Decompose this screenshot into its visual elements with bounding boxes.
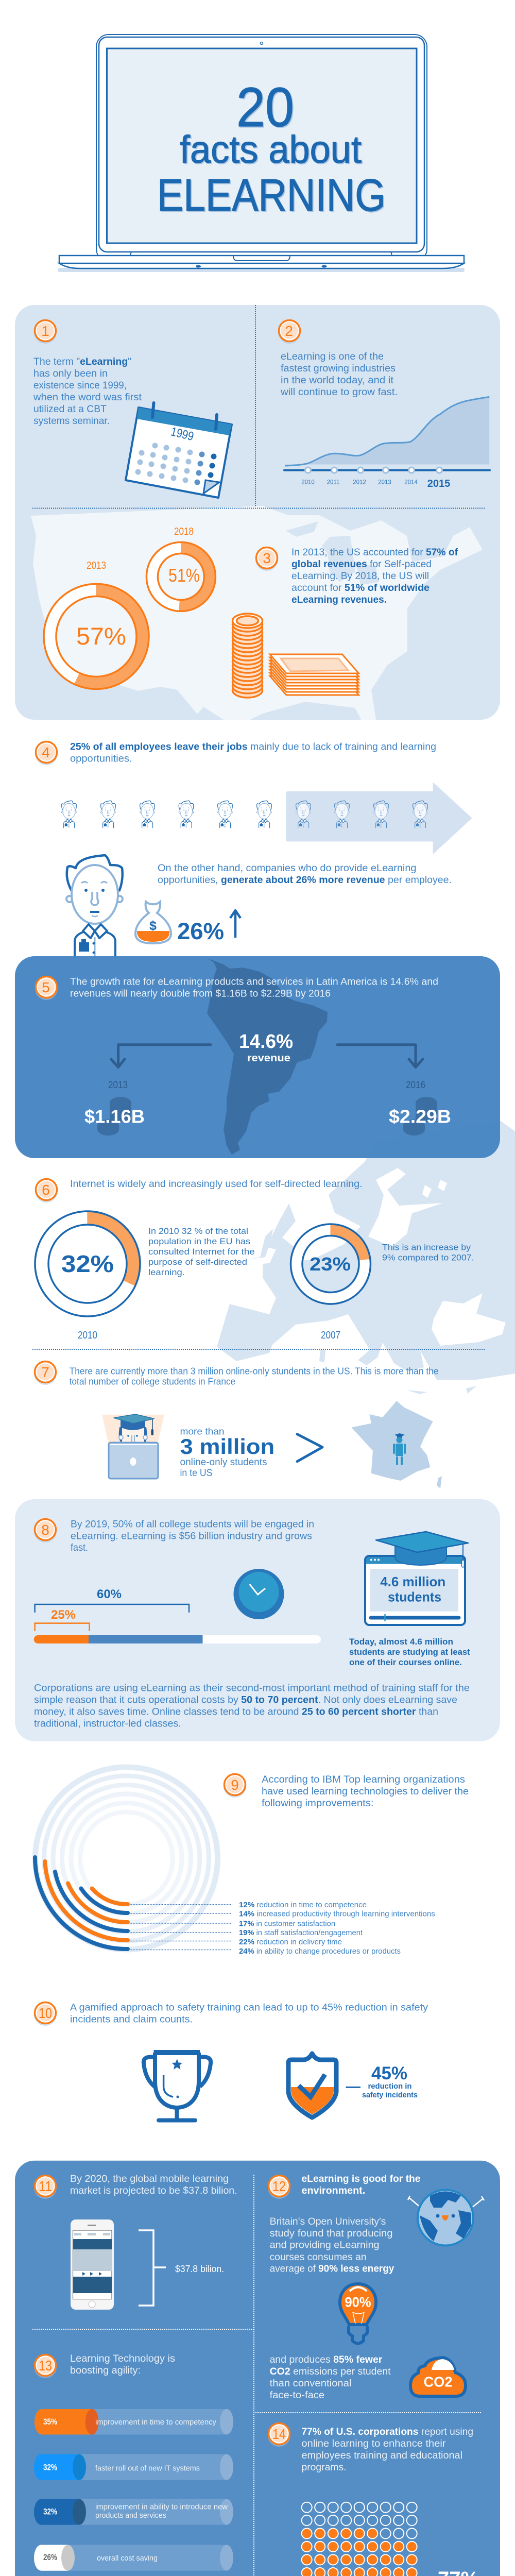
panel: fact 9 [35, 1767, 469, 1956]
fact 3 text: global revenues for Self-paced [291, 558, 432, 570]
arrow: to 2016 [337, 1045, 423, 1067]
fact 5 badge [35, 977, 58, 1000]
icon: greater than [297, 1434, 322, 1462]
fact 3 text: account for 51% of worldwide [291, 582, 430, 594]
chart: industry growth area timeline: 2011 [327, 479, 339, 485]
fact 12 heading: environment. [302, 2185, 365, 2196]
fact 14 text: 77% of U.S. corporations report using [302, 2426, 473, 2437]
fact 3 badge [255, 547, 278, 571]
stat: 26% up: 26% [177, 918, 224, 944]
stat: 3 million: more than [180, 1426, 225, 1436]
stat: 2016 revenue: $2.29B [389, 1106, 451, 1127]
fact 8 text: By 2019, 50% of all college students will be engaged in [71, 1518, 314, 1530]
text: today 4.6 million: Today, almost 4.6 million [349, 1637, 453, 1647]
fact 6 badge [35, 1179, 58, 1202]
fact 1 text: The term "eLearning" [33, 356, 131, 367]
fact 13 badge: 13 [39, 2358, 52, 2374]
fact 2 text [280, 351, 398, 398]
text: increase 2007: 9% compared to 2007. [382, 1253, 474, 1263]
fact 9 badge: 9 [231, 1777, 239, 1793]
panel: facts 1 to 3 [15, 305, 500, 720]
text: EU 2010: In 2010 32 % of the total [148, 1226, 248, 1236]
panel: fact 5 Latin America [15, 956, 500, 1158]
bar: 26% cost saving [34, 2545, 233, 2571]
fact 12 text: CO2: and produces 85% fewer [270, 2354, 383, 2365]
fact 1 text [33, 356, 142, 427]
donut: 2018 51% [146, 526, 215, 611]
panel: facts 11 to 14 [15, 2161, 500, 2576]
icon: large employee [66, 855, 123, 958]
chart: industry growth area timeline: 2013 [378, 479, 391, 485]
donut: 2013 57%: 57% [76, 622, 126, 650]
bar: 32% IT systems [34, 2454, 233, 2480]
text: today 4.6 million: students are studying at least [349, 1647, 470, 1657]
fact 5 badge: 5 [42, 979, 50, 995]
fact 11 badge [34, 2175, 57, 2199]
donut: 2018 51%: 51% [168, 565, 200, 586]
fact 1 badge [34, 320, 57, 344]
text: corporations paragraph [34, 1683, 470, 1729]
fact 11 text: By 2020, the global mobile learning [70, 2173, 229, 2184]
fact 12 badge: 12 [272, 2178, 286, 2194]
text: increase 2007: This is an increase by [382, 1243, 471, 1252]
fact 1 badge: 1 [41, 323, 49, 339]
donut: 2007 23%: 2007 [321, 1330, 340, 1341]
fact 13 text: Learning Technology is [70, 2353, 175, 2364]
fact 8 text: fast. [71, 1542, 88, 1553]
text: EU 2010: consulted Internet for the [148, 1247, 255, 1257]
fact 4 text [70, 741, 436, 765]
fact 11 badge: 11 [39, 2178, 52, 2194]
panel: fact 8 [15, 1499, 500, 1741]
stat: 2016 revenue: 2016 [406, 1080, 425, 1091]
fact 14 text: programs. [302, 2462, 346, 2473]
donut: 2018 51%: 2018 [174, 526, 194, 537]
icon: happy globe [408, 2190, 484, 2245]
map: France with student [351, 1401, 442, 1488]
dividers [32, 305, 485, 508]
fact 1 text: has only been in [33, 368, 108, 379]
chart: concentric improvement rings [35, 1767, 232, 1950]
icon: CO2 cloud [410, 2358, 466, 2396]
title: facts about [180, 128, 362, 171]
fact 12 text: energy: and providing eLearning [270, 2240, 380, 2251]
fact 9 text [262, 1774, 469, 1809]
fact 1 text: utilized at a CBT [33, 403, 107, 415]
bar: 25% and 60% progress [34, 1587, 321, 1643]
fact 4 text: 25% of all employees leave their jobs mainly due to lack of training and learning [70, 741, 436, 752]
icon: clock [234, 1569, 284, 1619]
text: increase 2007 [382, 1243, 474, 1263]
legend: improvements: 24% in ability to change procedures or products [239, 1947, 401, 1956]
fact 8 text: eLearning. eLearning is $56 billion industry and grows [71, 1530, 312, 1541]
fact 8 badge [34, 1519, 57, 1543]
bar: 35% time to competency: 35% [43, 2417, 57, 2427]
stat: 14.6% revenue: 14.6% [239, 1031, 293, 1053]
icon: CO2 cloud: CO2 [423, 2374, 452, 2390]
icon: calendar 1999: 1999 [169, 425, 195, 444]
fact 10 badge: 10 [39, 2005, 52, 2021]
text: today 4.6 million: one of their courses online. [349, 1657, 462, 1667]
fact 12 text: energy: study found that producing [270, 2228, 393, 2239]
fact 12 text: energy: average of 90% less energy [270, 2263, 394, 2275]
fact 2 badge [278, 320, 301, 344]
fact 4 badge [35, 742, 58, 765]
stat: 2013 revenue [84, 1080, 145, 1136]
bar: 26% cost saving: overall cost saving [97, 2554, 158, 2563]
bracket and stat: $37.8 bilion: $37.8 bilion. [175, 2264, 224, 2274]
fact 3 text: In 2013, the US accounted for 57% of [291, 547, 458, 558]
fact 8 badge: 8 [41, 1522, 49, 1538]
stat: 2016 revenue [389, 1080, 451, 1136]
stat: 45% reduction: 45% [371, 2063, 407, 2083]
fact 2 text: will continue to grow fast. [280, 386, 398, 398]
text: EU 2010: population in the EU has [148, 1236, 250, 1246]
stat: 45% reduction [362, 2063, 418, 2099]
fact 3 text: eLearning revenues. [291, 594, 387, 605]
donut: 2010 32% [35, 1211, 140, 1341]
fact 12 text: CO2: than conventional [270, 2378, 351, 2389]
chart: industry growth area timeline: 2010 [301, 479, 315, 485]
donut: 2007 23%: 23% [310, 1253, 351, 1275]
stat: 45% reduction: reduction in [368, 2082, 412, 2091]
stat: 45% reduction: safety incidents [362, 2091, 418, 2099]
fact 4 text: opportunities. [70, 753, 132, 765]
icon: trophy [144, 2053, 211, 2121]
stat: 3 million: online-only students [180, 1457, 267, 1468]
icon: browser with graduation cap: students [388, 1589, 441, 1605]
fact 12 text: CO2 [270, 2354, 391, 2401]
fact 7 text: total number of college students in France [70, 1377, 235, 1387]
fact 5 text: revenues will nearly double from $1.16B to $2.29B by 2016 [70, 988, 331, 999]
text: corporations paragraph: money, it also saves time. Online classes tend to be around 25 to 60 percent shorter than [34, 1706, 438, 1718]
panel: fact 4 [35, 741, 472, 958]
fact 2 text: eLearning is one of the [281, 351, 384, 362]
map: Europe background [217, 1121, 515, 1394]
bar: 35% time to competency [35, 2409, 233, 2435]
fact 7 badge [34, 1361, 57, 1385]
donut: 2010 32%: 2010 [78, 1330, 97, 1341]
fact 10 badge [34, 2002, 57, 2026]
fact 2 badge: 2 [285, 323, 293, 339]
text: EU 2010 [148, 1226, 255, 1277]
bar: 32% new products: products and services [95, 2511, 166, 2520]
icon: student with laptop [102, 1414, 164, 1479]
title: ELEARNING [157, 170, 386, 221]
fact 9 text: following improvements: [262, 1798, 374, 1809]
icon: smartphone [71, 2219, 114, 2310]
donut: 2007 23% [290, 1224, 371, 1341]
bar: 25% and 60% progress: 60% [97, 1587, 122, 1601]
icon: safety shield [288, 2054, 360, 2117]
text: corporations paragraph: Corporations are using eLearning as their second-most important method of training staff for the [34, 1683, 470, 1694]
fact 14 text: online learning to enhance their [302, 2438, 446, 2449]
legend: improvements [239, 1901, 435, 1956]
bar: 32% IT systems: faster roll out of new IT systems [95, 2464, 200, 2473]
text: corporations paragraph: traditional, instructor-led classes. [34, 1718, 181, 1729]
fact 12 text: energy: courses consumes an [270, 2251, 367, 2263]
legend: improvements: 12% reduction in time to competence [239, 1901, 367, 1909]
stat: 14.6% revenue [239, 1031, 293, 1064]
dividers [32, 2175, 482, 2576]
stat: 2013 revenue: 2013 [108, 1080, 128, 1091]
panel: fact 7 [34, 1361, 442, 1488]
icons: ten employees [61, 801, 427, 828]
fact 3 text [291, 547, 458, 605]
icon: light bulb 90% [340, 2284, 376, 2343]
fact 1 text: when the word was first [33, 392, 142, 403]
title: 20 [236, 76, 294, 138]
fact 2 text: fastest growing industries [281, 363, 396, 374]
fact 7 badge: 7 [41, 1364, 49, 1380]
legend: improvements: 22% reduction in delivery time [239, 1938, 342, 1946]
arrow: employees leaving [286, 782, 472, 854]
text: corporations paragraph: simple reason that it cuts operational costs by 50 to 70 percent. Not only does eLearning save [34, 1694, 457, 1706]
icon: light bulb 90%: 90% [345, 2295, 371, 2310]
chart: 77% dot grid [302, 2502, 417, 2576]
bar: 25% and 60% progress: 25% [51, 1608, 76, 1622]
bar: 35% time to competency: improvement in time to competency [95, 2418, 216, 2427]
bar: 32% new products: 32% [43, 2507, 57, 2516]
arrow: to 2013 [111, 1045, 211, 1067]
fact 9 badge [224, 1774, 246, 1798]
icon: money bag: $ [149, 919, 157, 933]
icon: browser with graduation cap: 4.6 million [380, 1574, 445, 1589]
fact 10 text: A gamified approach to safety training can lead to up to 45% reduction in safety [70, 2002, 428, 2013]
fact 5 text: The growth rate for eLearning products and services in Latin America is 14.6% and [70, 976, 438, 987]
fact 12 badge [268, 2175, 290, 2199]
fact 6 text: Internet is widely and increasingly used for self-directed learning. [70, 1178, 363, 1190]
legend: improvements: 14% increased productivity through learning interventions [239, 1909, 435, 1919]
stat: 14.6% revenue: revenue [247, 1053, 290, 1064]
text: revenue per employee [158, 862, 452, 886]
fact 8 text [71, 1518, 314, 1553]
panel: fact 10 [34, 2002, 428, 2121]
chart: industry growth area timeline: 2015 [427, 478, 450, 489]
title laptop illustration [58, 35, 465, 272]
donut: 2013 57%: 2013 [87, 560, 106, 571]
fact 10 text: incidents and claim counts. [70, 2014, 193, 2025]
icon: coin stack [233, 614, 263, 698]
fact 9 text: have used learning technologies to deliver the [262, 1786, 469, 1797]
icon: money bag [135, 902, 171, 943]
icon: calendar 1999 [126, 403, 232, 498]
fact 13 text [70, 2353, 175, 2376]
fact 12 heading: eLearning is good for the [302, 2173, 421, 2184]
chart: industry growth area timeline: 2012 [353, 479, 366, 485]
bar: 26% cost saving: 26% [43, 2552, 57, 2562]
fact 1 text: systems seminar. [33, 415, 110, 427]
fact 14 text: employees training and educational [302, 2450, 462, 2461]
fact 12 text: energy [270, 2216, 394, 2275]
legend: improvements: 17% in customer satisfaction [239, 1920, 335, 1928]
fact 14 badge: 14 [272, 2426, 286, 2442]
text: today 4.6 million [349, 1637, 470, 1667]
bar: 32% new products [34, 2499, 233, 2525]
fact 9 text: According to IBM Top learning organizations [262, 1774, 465, 1785]
stat: 26% up [177, 910, 241, 944]
icon: browser with graduation cap [365, 1532, 468, 1625]
fact 12 text: CO2: CO2 emissions per student [270, 2366, 391, 2377]
fact 11 text [70, 2173, 237, 2196]
fact 14 badge [268, 2424, 290, 2447]
donut: 2010 32%: 32% [61, 1250, 114, 1277]
bracket and stat: $37.8 bilion [139, 2230, 224, 2306]
fact 3 badge: 3 [263, 550, 271, 566]
text: revenue per employee: opportunities, generate about 26% more revenue per employee. [158, 874, 452, 886]
fact 2 text: in the world today, and it [281, 375, 394, 386]
fact 5 text [70, 976, 438, 999]
fact 10 text [70, 2002, 428, 2025]
donut: 2013 57% [44, 560, 149, 689]
map: United States [31, 506, 483, 720]
stat: 2013 revenue: $1.16B [84, 1106, 145, 1127]
fact 11 text: market is projected to be $37.8 bilion. [70, 2185, 237, 2196]
fact 12 text: CO2: face-to-face [270, 2389, 324, 2401]
stat: 3 million [180, 1426, 274, 1479]
fact 12 heading [302, 2173, 421, 2196]
fact 14 text [302, 2426, 473, 2473]
text: EU 2010: learning. [148, 1267, 185, 1277]
stat: 3 million: 3 million [180, 1434, 274, 1459]
text: revenue per employee: On the other hand, companies who do provide eLearning [158, 862, 416, 874]
map: South America [207, 958, 328, 1155]
stat: 3 million: in te US [180, 1468, 212, 1479]
title [157, 76, 386, 221]
fact 13 badge [34, 2354, 57, 2378]
fact 12 text: energy: Britain's Open University's [270, 2216, 386, 2227]
chart: industry growth area timeline [284, 397, 490, 489]
fact 4 badge: 4 [42, 744, 50, 760]
fact 1 text: existence since 1999, [33, 380, 127, 391]
panel: fact 6 [35, 1178, 474, 1341]
fact 7 text: There are currently more than 3 million online-only stundents in the US. This is more than the [70, 1366, 439, 1376]
fact 7 text [70, 1366, 439, 1387]
fact 3 text: eLearning. By 2018, the US will [291, 570, 429, 582]
legend: improvements: 19% in staff satisfaction/engagement [239, 1928, 363, 1937]
icon: banknote stack [270, 654, 358, 695]
chart: industry growth area timeline: 2014 [404, 479, 418, 485]
bar: 32% IT systems: 32% [43, 2463, 57, 2472]
fact 13 text: boosting agility: [70, 2365, 141, 2376]
text: EU 2010: purpose of self-directed [148, 1257, 247, 1267]
bar: 32% new products: improvement in ability to introduce new [95, 2503, 228, 2512]
fact 6 badge: 6 [42, 1182, 50, 1198]
